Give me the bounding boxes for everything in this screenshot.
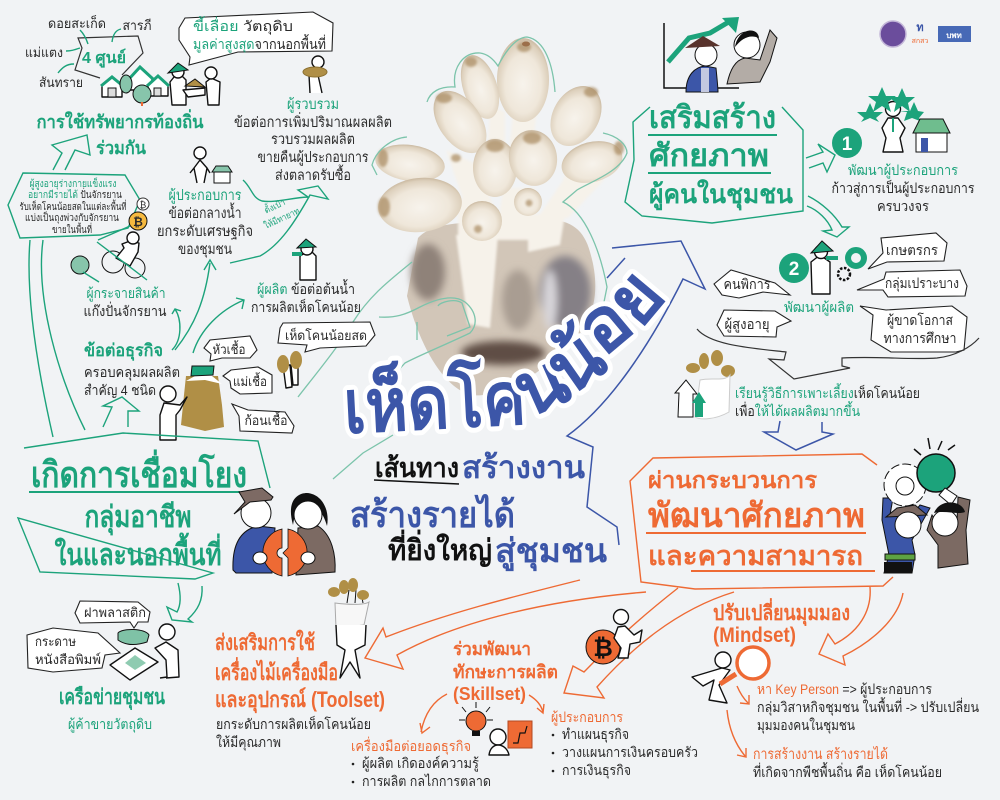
panel: เกิดการเชื่อมโยง: ในและนอกพื้นที่ [54, 532, 222, 572]
text: เรียนรู้วิธีการเพาะเลี้ยง: เรียนรู้วิธีการเพาะเลี้ยงเห็ดโคนน้อย [735, 383, 920, 402]
text: ผู้กระจายสินค้า: แก๊งปั่นจักรยาน [84, 302, 167, 319]
callouts: target groups: ผู้ขาดโอกาส [887, 312, 953, 329]
text: ผู้รวบรวม: รวบรวมผลผลิต [271, 132, 355, 148]
callouts: target groups: กลุ่มเปราะบาง [885, 275, 959, 292]
text: พัฒนาผู้ประกอบการ: พัฒนาผู้ประกอบการ [848, 162, 958, 179]
text: หา Key Person: กลุ่มวิสาหกิจชุมชน ในพื้นที่ -> ปรับเปลี่ยน [757, 697, 979, 716]
icon: team lifting gear and bulb [882, 438, 970, 573]
logos: partner organisations: บพท [946, 31, 962, 40]
arrow: large orange to tools [365, 580, 646, 669]
text: ร่วมพัฒนาทักษะการผลิต (Skillset): ร่วมพัฒนา [453, 639, 531, 659]
text: ผู้ผลิต ข้อต่อต้นน้ำ: ผู้ผลิต ข้อต่อต้นน้ำ [257, 279, 355, 298]
text: ผู้ประกอบการ orange list: วางแผนการเงินครอบครัว [562, 744, 698, 760]
text: ข้อต่อธุรกิจ: ข้อต่อธุรกิจ [84, 341, 163, 361]
panel: เสริมสร้างศักยภาพ: เสริมสร้าง [649, 100, 776, 135]
panel: 4 ศูนย์ speech bubble and villages: 4 ศูนย์ [82, 48, 126, 69]
text: ผู้ประกอบการ ข้อต่อกลางน้ำ: ยกระดับเศรษฐกิจ [157, 224, 253, 240]
text: ข้อต่อธุรกิจ: ครอบคลุมผลผลิต [84, 364, 180, 381]
callout: กระดาษ หนังสือพิมพ์: หนังสือพิมพ์ [35, 652, 101, 667]
callout: ขี้เลื่อย วัตถุดิบ [179, 12, 333, 65]
text: ร่วมพัฒนาทักษะการผลิต (Skillset) [453, 639, 558, 704]
callout: ฝาพลาสติก [75, 601, 150, 628]
panel: ผ่านกระบวนการ พัฒนาศักยภาพ: ผ่านกระบวนการ [648, 467, 818, 493]
panel: เกิดการเชื่อมโยง [18, 433, 270, 579]
text: ผู้รวบรวม: ข้อต่อการเพิ่มปริมาณผลผลิต [234, 112, 392, 131]
text: พัฒนาผู้ประกอบการ: ก้าวสู่การเป็นผู้ประกอบการ [832, 179, 975, 197]
title: เห็ดโคนน้อย: น [501, 336, 581, 433]
icon: mushrooms pair [277, 351, 302, 388]
text: ผู้รวบรวม: ขายคืนผู้ประกอบการ [258, 149, 369, 166]
icon: person with store [190, 147, 232, 183]
text: ผู้ประกอบการ ข้อต่อกลางน้ำ: ข้อต่อกลางน้ำ [168, 202, 242, 222]
icon: two people with puzzle [233, 488, 335, 576]
text: หา Key Person [757, 681, 979, 734]
subtitle: เส้นทางสร้างงาน สร้างรายได้ ที่ยิ่งใหญ่สู่ชุมชน [350, 450, 607, 572]
panel: ผ่านกระบวนการ พัฒนาศักยภาพ: พัฒนาศักยภาพ [648, 497, 865, 535]
text: หา Key Person: มุมมองคนในชุมชน [757, 717, 855, 734]
logos: partner organisations: สกสว [912, 38, 928, 45]
text: หา Key Person: หา Key Person => ผู้ประกอบการ [757, 681, 932, 698]
icon: entrepreneur with stars and store [857, 87, 950, 152]
text: ส่งเสริมการใช้เครื่องไม้เครื่องมือ (Toolset): และอุปกรณ์ (Toolset) [215, 687, 385, 714]
text: เครือข่ายชุมชน: เครือข่ายชุมชน [59, 685, 165, 711]
arrow: green up to resources [52, 135, 90, 170]
callout: ฝาพลาสติก: ฝาพลาสติก [84, 605, 146, 620]
arrows: green links from business joints [172, 260, 244, 353]
text: เครื่องมือต่อยอดธุรกิจ [351, 737, 491, 789]
title: เห็ดโคนน้อย: น้ [531, 313, 620, 410]
arrow: orange to mindset [819, 587, 903, 665]
icon: village houses [101, 67, 169, 106]
panel: ผ่านกระบวนการ พัฒนาศักยภาพ [630, 454, 893, 589]
icon: collector figure [303, 56, 327, 93]
panel: 4 ศูนย์ speech bubble and villages: สารภี [122, 18, 152, 33]
text: ผู้กระจายสินค้า: ผู้กระจายสินค้า [86, 285, 166, 302]
panel: ผ่านกระบวนการ พัฒนาศักยภาพ: และความสามารถ [648, 541, 863, 571]
arrow: green to developer 2 [807, 196, 849, 237]
callout: ขี้เลื่อย วัตถุดิบ: มูลค่าสูงสุดจากนอกพื้นที่ [193, 34, 326, 53]
text: ร่วมพัฒนาทักษะการผลิต (Skillset): ทักษะการผลิต [453, 662, 558, 682]
text: เรียนรู้วิธีการเพาะเลี้ยง [735, 383, 920, 419]
arrow: dark curved down arrow [697, 329, 979, 379]
text: ข้อต่อธุรกิจ [84, 341, 180, 398]
subtitle: เส้นทางสร้างงาน สร้างรายได้ ที่ยิ่งใหญ่สู่ชุมชน: สร้างงาน [462, 450, 585, 485]
text: ผู้ประกอบการ orange list: ทำแผนธุรกิจ [562, 726, 629, 743]
arrow: big blue arrow to upper right [567, 241, 705, 545]
text: ผู้ผลิต ข้อต่อต้นน้ำ [251, 279, 361, 315]
arrows: long green up from main box [29, 240, 139, 437]
text: ร่วมพัฒนาทักษะการผลิต (Skillset): (Skillset) [453, 684, 526, 704]
arrow: succession arrow with label: ให้มีทายาท [262, 206, 301, 231]
callout: ขี้เลื่อย วัตถุดิบ: ขี้เลื่อย วัตถุดิบ [193, 16, 293, 35]
text: ผู้ประกอบการ ข้อต่อกลางน้ำ: ผู้ประกอบการ [168, 187, 242, 204]
icon: bitcoin coins and cyclist: ₿ [140, 200, 147, 210]
panel: senior cyclist note: ขายในพื้นที่ [52, 222, 92, 236]
text: ผู้รวบรวม: ผู้รวบรวม [287, 96, 339, 113]
text: ผู้ประกอบการ orange list: ผู้ประกอบการ [551, 709, 623, 726]
line art: thin teal mushroom outline [298, 37, 627, 479]
callouts: spawn stages: ก้อนเชื้อ [244, 411, 288, 428]
logos: partner organisations: ท [916, 22, 924, 34]
icon: chart and two people [664, 17, 777, 92]
panel: เกิดการเชื่อมโยง: กลุ่มอาชีพ [84, 501, 192, 536]
badge: number 2: 2 [789, 259, 799, 280]
badge: number 2 [779, 253, 809, 283]
text: เรียนรู้วิธีการเพาะเลี้ยง: เพื่อให้ได้ผลผลิตมากขึ้น [735, 401, 860, 419]
text: ส่งเสริมการใช้เครื่องไม้เครื่องมือ (Toolset): ให้มีคุณภาพ [216, 734, 281, 751]
panel: 4 ศูนย์ speech bubble and villages: ดอยสะเก็ด [48, 14, 106, 31]
arrow: blue small down [764, 421, 833, 450]
callouts: target groups [714, 233, 967, 352]
text: ส่งเสริมการใช้เครื่องไม้เครื่องมือ (Toolset) [215, 629, 385, 751]
title: เห็ดโคนน้อย: อ [560, 278, 647, 370]
icon: plastic lid, papers and person [110, 624, 179, 680]
title: เห็ดโคนน้อย [341, 254, 680, 449]
panel: senior cyclist note: แบ่งเป็นถุงพ่วงกับจักรยาน [25, 210, 119, 224]
panel: เสริมสร้างศักยภาพ [625, 100, 803, 223]
text: พัฒนาผู้ผลิต: พัฒนาผู้ผลิต [784, 299, 854, 316]
callouts: target groups: เกษตรกร [886, 242, 938, 258]
icon: mushroom bag and up arrows [675, 350, 735, 419]
text: ปรับเปลี่ยนมุมมอง (Mindset): (Mindset) [713, 624, 796, 647]
panel: senior cyclist note: รับเห็ดโคนน้อยสดในแต่ละพื้นที่ [20, 199, 126, 213]
arrows: small orange to skills [420, 694, 544, 733]
icon: two farmers carrying basket [168, 63, 220, 105]
text: เครือข่ายชุมชน: ผู้ค้าขายวัตถุดิบ [68, 716, 152, 733]
text: ผู้ผลิต ข้อต่อต้นน้ำ: การผลิตเห็ดโคนน้อย [251, 298, 361, 315]
title: เห็ดโคนน้อย: เห็ดโค [341, 355, 528, 449]
subtitle: เส้นทางสร้างงาน สร้างรายได้ ที่ยิ่งใหญ่สู่ชุมชน: สร้างรายได้ [350, 493, 515, 535]
text: ผู้รวบรวม: ส่งตลาดรับซื้อ [275, 164, 351, 184]
icon: light bulb, person and chart [459, 702, 532, 755]
text: เครือข่ายชุมชน [59, 685, 165, 733]
text: ผู้กระจายสินค้า [84, 285, 167, 319]
text: พัฒนาผู้ประกอบการ: ครบวงจร [877, 198, 929, 214]
arrow: succession arrow with label [230, 180, 328, 263]
icon: farmer with gears [811, 241, 864, 294]
heading: การใช้ทรัพยากรท้องถิ่นร่วมกัน: การใช้ทรัพยากรท้องถิ่น [36, 109, 204, 132]
text: เครื่องมือต่อยอดธุรกิจ: การผลิต กลไกการตลาด [362, 773, 491, 789]
text: ปรับเปลี่ยนมุมมอง (Mindset) [713, 597, 850, 647]
panel: เสริมสร้างศักยภาพ: ศักยภาพ [649, 138, 769, 173]
callouts: target groups: คนพิการ [724, 276, 771, 292]
arrows: green down to community network [167, 583, 202, 622]
text: การสร้างงาน สร้างรายได้: ที่เกิดจากพืชพื้นถิ่น คือ เห็ดโคนน้อย [753, 762, 942, 780]
icon: producer figure [292, 239, 316, 280]
subtitle: เส้นทางสร้างงาน สร้างรายได้ ที่ยิ่งใหญ่สู่ชุมชน: เส้นทาง [375, 453, 459, 483]
text: ผู้ประกอบการ orange list: การเงินธุรกิจ [562, 762, 631, 779]
icon: person with magnifying glass [692, 647, 769, 703]
text: ส่งเสริมการใช้เครื่องไม้เครื่องมือ (Toolset): ส่งเสริมการใช้ [215, 629, 315, 655]
text: ผู้รวบรวม [234, 96, 392, 184]
panel: เกิดการเชื่อมโยง: เกิดการเชื่อมโยง [31, 449, 247, 495]
text: ส่งเสริมการใช้เครื่องไม้เครื่องมือ (Toolset): ยกระดับการผลิตเห็ดโคนน้อย [216, 715, 371, 732]
arrow: orange to business plan [564, 588, 734, 698]
logos: partner organisations [880, 21, 971, 47]
text: ส่งเสริมการใช้เครื่องไม้เครื่องมือ (Toolset): เครื่องไม้เครื่องมือ [215, 656, 338, 685]
arrow: green to developer 1 [806, 144, 835, 172]
subtitle: เส้นทางสร้างงาน สร้างรายได้ ที่ยิ่งใหญ่สู่ชุมชน: สู่ชุมชน [495, 532, 607, 572]
callout: กระดาษ หนังสือพิมพ์: กระดาษ [35, 634, 76, 649]
text: การสร้างงาน สร้างรายได้: การสร้างงาน สร้างรายได้ [753, 745, 888, 763]
panel: 4 ศูนย์ speech bubble and villages: แม่แตง [25, 45, 63, 60]
callouts: spawn stages: เห็ดโคนน้อยสด [285, 326, 367, 343]
panel: 4 ศูนย์ speech bubble and villages [25, 14, 220, 106]
callouts: spawn stages: แม่เชื้อ [233, 372, 267, 389]
icon: person pushing bitcoin: ₿ [593, 635, 613, 662]
callouts: target groups: ทางการศึกษา [884, 330, 956, 346]
text: ผู้ประกอบการ ข้อต่อกลางน้ำ: ของชุมชน [178, 242, 232, 258]
heading: การใช้ทรัพยากรท้องถิ่นร่วมกัน: ร่วมกัน [96, 138, 147, 158]
photo: mushroom cluster in bag [373, 38, 627, 395]
icon: bitcoin coins and cyclist [71, 198, 149, 282]
callouts: target groups: ผู้สูงอายุ [724, 316, 770, 333]
panel: 4 ศูนย์ speech bubble and villages: สันทราย [39, 75, 83, 90]
text: ผู้ประกอบการ ข้อต่อกลางน้ำ [157, 187, 253, 258]
icon: person lifting mushroom bag [328, 578, 369, 678]
arrows: small orange mindset branches [727, 686, 749, 757]
text: พัฒนาผู้ประกอบการ [832, 162, 975, 214]
text: เครื่องมือต่อยอดธุรกิจ: ผู้ผลิต เกิดองค์ความรู้ [362, 755, 479, 772]
text: การสร้างงาน สร้างรายได้ [753, 745, 942, 780]
heading: การใช้ทรัพยากรท้องถิ่นร่วมกัน [36, 109, 204, 158]
text: เครื่องมือต่อยอดธุรกิจ: เครื่องมือต่อยอดธุรกิจ [351, 737, 471, 755]
text: ปรับเปลี่ยนมุมมอง (Mindset): ปรับเปลี่ยนมุมมอง [713, 597, 850, 627]
callouts: spawn stages: หัวเชื้อ [212, 340, 246, 357]
icon: spawn jar with person [160, 366, 224, 440]
panel: senior cyclist note [8, 173, 140, 238]
badge: number 1 [832, 128, 862, 158]
panel: senior cyclist note: อยากมีรายได้ ปั่นจักรยาน [28, 187, 122, 201]
title: เห็ดโคนน้อย: ย [589, 254, 680, 340]
callout: กระดาษ หนังสือพิมพ์ [27, 628, 120, 672]
text: ผู้ประกอบการ orange list [551, 709, 698, 779]
icon: bitcoin coins and cyclist: ₿ [133, 215, 143, 229]
subtitle: เส้นทางสร้างงาน สร้างรายได้ ที่ยิ่งใหญ่สู่ชุมชน: ที่ยิ่งใหญ่ [388, 529, 492, 568]
arrow: succession arrow with label: ตั้งเป้า [262, 195, 287, 215]
callouts: spawn stages [204, 322, 375, 433]
badge: number 1: 1 [842, 134, 853, 155]
panel: เสริมสร้างศักยภาพ: ผู้คนในชุมชน [649, 179, 793, 211]
panel: senior cyclist note: ผู้สูงอายุร่างกายแข็งแรง [30, 176, 117, 190]
text: ข้อต่อธุรกิจ: สำคัญ 4 ชนิด [84, 382, 156, 398]
icon: person pushing bitcoin [586, 610, 642, 664]
